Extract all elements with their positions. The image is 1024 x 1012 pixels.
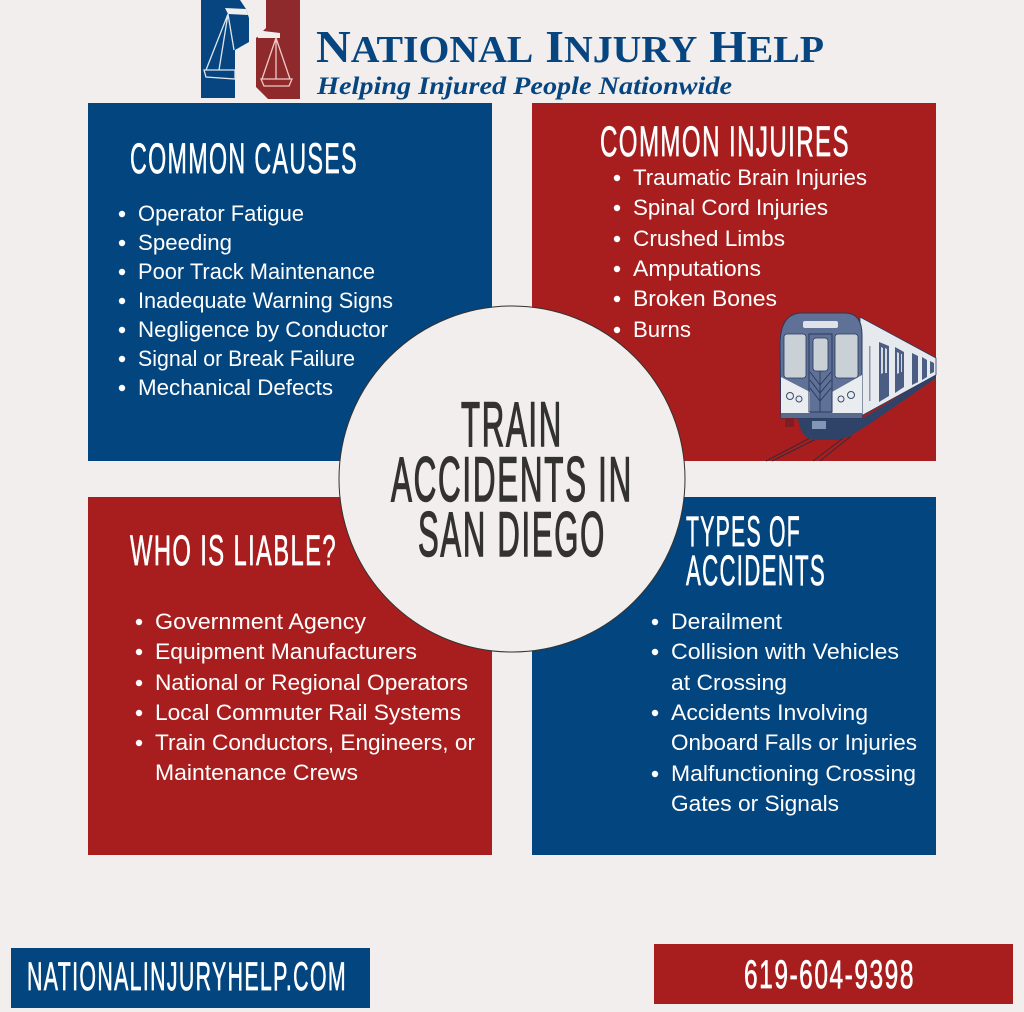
list: injuries: Amputations bbox=[633, 256, 761, 281]
door window panes bbox=[881, 347, 902, 374]
panel: common causes bbox=[88, 103, 492, 461]
heading: types of accidents bbox=[686, 508, 826, 595]
side of carriage bbox=[860, 317, 936, 415]
list: accident types: Accidents Involving bbox=[671, 700, 868, 725]
list: accident types: Malfunctioning Crossing bbox=[671, 761, 916, 786]
list: liable parties: National or Regional Operators bbox=[155, 670, 468, 695]
logo: National Injury Help bbox=[201, 0, 824, 100]
list: accident types: Onboard Falls or Injuries bbox=[671, 730, 917, 755]
center circle title: ACCIDENTS IN bbox=[391, 445, 633, 515]
website button bbox=[11, 948, 370, 1008]
phone button: 619-604-9398 bbox=[744, 953, 915, 997]
panel: who is liable bbox=[88, 497, 492, 855]
list: accident types: at Crossing bbox=[671, 670, 787, 695]
heading: types of accidents: TYPES OF bbox=[686, 508, 801, 556]
list: accident types bbox=[652, 609, 917, 816]
list: liable parties: Maintenance Crews bbox=[155, 760, 358, 785]
logo tagline: Helping Injured People Nationwide bbox=[316, 73, 732, 100]
list: liable parties bbox=[136, 609, 475, 785]
list: injuries: Spinal Cord Injuries bbox=[633, 195, 828, 220]
list: liable parties: Equipment Manufacturers bbox=[155, 639, 417, 664]
logo name: NATIONAL INJURY HELP bbox=[316, 21, 824, 72]
list: accident types: Collision with Vehicles bbox=[671, 639, 899, 664]
list: accident types: Gates or Signals bbox=[671, 791, 839, 816]
list: causes: Poor Track Maintenance bbox=[138, 259, 375, 284]
coupler bbox=[812, 421, 826, 429]
rails bbox=[766, 436, 851, 461]
heading: common causes: COMMON CAUSES bbox=[130, 135, 358, 183]
undercarriage bbox=[798, 374, 936, 440]
list: accident types: Derailment bbox=[671, 609, 782, 634]
center circle title: SAN DIEGO bbox=[418, 500, 606, 570]
heading: types of accidents: ACCIDENTS bbox=[686, 547, 826, 595]
phone button bbox=[654, 944, 1013, 1004]
website button: NATIONALINJURYHELP.COM bbox=[27, 955, 347, 999]
door chevrons bbox=[809, 334, 832, 412]
list: injuries: Traumatic Brain Injuries bbox=[633, 165, 867, 190]
list: liable parties: Government Agency bbox=[155, 609, 366, 634]
center circle title bbox=[339, 306, 685, 652]
list: injuries: Burns bbox=[633, 317, 691, 342]
icon: scales of justice bbox=[201, 0, 300, 99]
list: liable parties: Train Conductors, Engineers, or bbox=[155, 730, 475, 755]
panel: common injuries bbox=[532, 103, 936, 461]
lower white front bbox=[781, 377, 810, 413]
list: causes: Mechanical Defects bbox=[138, 375, 333, 400]
list: injuries bbox=[614, 165, 867, 342]
list: causes: Negligence by Conductor bbox=[138, 317, 388, 342]
center circle title: TRAIN bbox=[461, 390, 563, 460]
list: causes bbox=[119, 201, 393, 400]
list: injuries: Broken Bones bbox=[633, 286, 777, 311]
list: causes: Operator Fatigue bbox=[138, 201, 304, 226]
panel: types of accidents bbox=[532, 497, 936, 855]
list: injuries: Crushed Limbs bbox=[633, 226, 785, 251]
list: causes: Speeding bbox=[138, 230, 232, 255]
front face bbox=[780, 313, 862, 418]
list: causes: Signal or Break Failure bbox=[138, 346, 355, 371]
list: liable parties: Local Commuter Rail Systems bbox=[155, 700, 461, 725]
headlights bbox=[786, 392, 854, 402]
windows bbox=[784, 334, 806, 378]
list: causes: Inadequate Warning Signs bbox=[138, 288, 393, 313]
heading: who is liable: WHO IS LIABLE? bbox=[130, 527, 337, 575]
icon: train bbox=[766, 313, 936, 461]
